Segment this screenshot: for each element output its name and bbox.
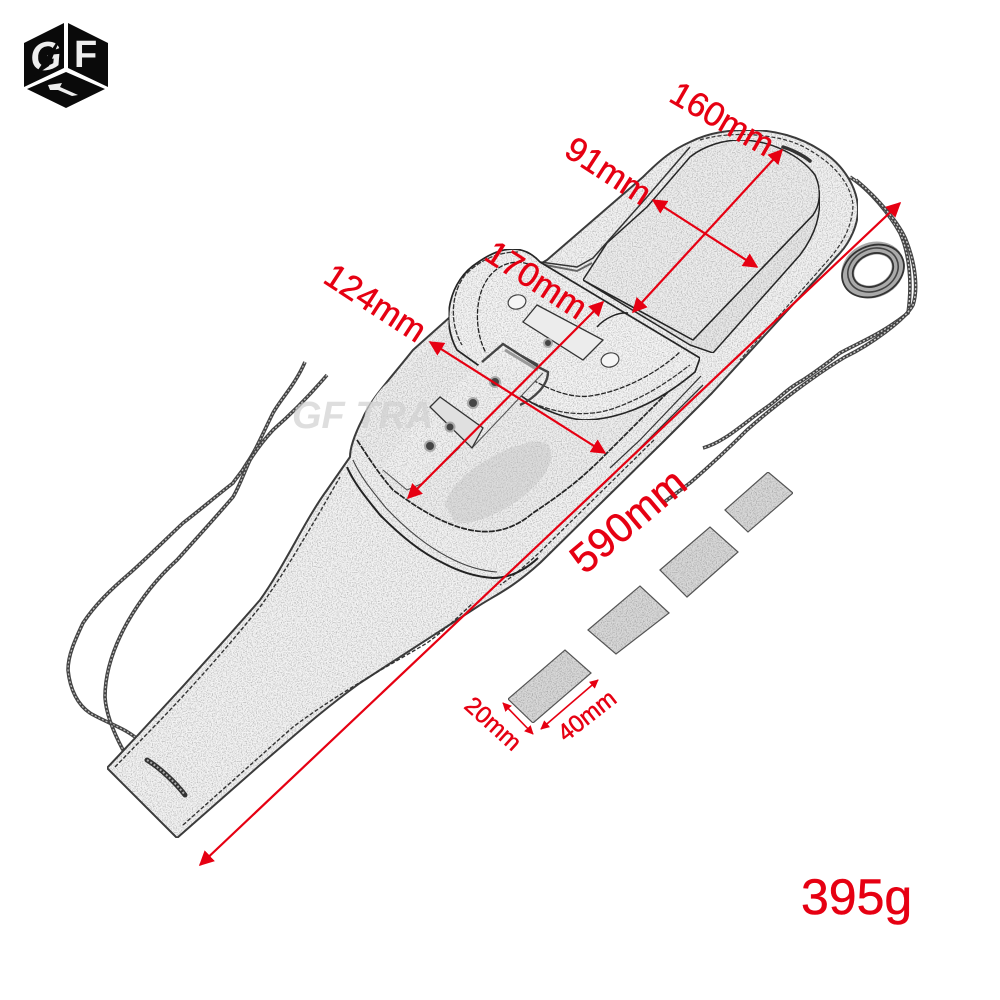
strap holes bbox=[425, 339, 552, 451]
lower pouch seam bbox=[347, 467, 538, 578]
back panel stitching bbox=[700, 135, 853, 360]
tail stitching bbox=[115, 477, 473, 825]
right edge double seam bbox=[500, 440, 654, 585]
watermark: GF TRA bbox=[292, 395, 433, 437]
label: 160mm: 160mm bbox=[663, 74, 781, 164]
upper pocket panel bbox=[583, 140, 819, 340]
label: 124mm: 124mm bbox=[317, 257, 433, 350]
pouch shading bbox=[445, 441, 551, 523]
strap keeper bbox=[430, 397, 483, 448]
label: 91mm: 91mm bbox=[558, 130, 658, 213]
dimension arrows bbox=[200, 150, 900, 865]
label: 20mm: 20mm bbox=[459, 692, 527, 756]
label: 40mm: 40mm bbox=[553, 685, 622, 747]
lower pouch seam line bbox=[357, 367, 693, 532]
flap rivets bbox=[506, 293, 621, 369]
buckle upper tab bbox=[523, 305, 603, 360]
label: 590mm: 590mm bbox=[561, 459, 695, 582]
left side cords bbox=[68, 362, 327, 750]
lower pouch panel bbox=[357, 330, 697, 532]
buckle frame bbox=[482, 344, 548, 405]
flap slit bbox=[597, 313, 628, 327]
top slot bbox=[783, 147, 810, 161]
leather tank bag body bbox=[107, 130, 858, 838]
right side cords with coil bbox=[663, 177, 916, 503]
body outline with grain bbox=[107, 130, 858, 838]
logo: GF cube: G bbox=[28, 33, 64, 80]
tail slot bbox=[147, 760, 185, 795]
label: 170mm: 170mm bbox=[478, 234, 594, 327]
logo: GF cube bbox=[24, 23, 108, 108]
logo: GF cube: F bbox=[74, 34, 97, 76]
strap bbox=[383, 362, 543, 490]
velcro strips bbox=[508, 472, 793, 723]
label: weight 395g: 395g bbox=[801, 869, 912, 925]
upper pocket band bbox=[583, 190, 820, 353]
main flap bbox=[449, 249, 700, 420]
flap stitching bbox=[453, 252, 690, 414]
side fold bbox=[540, 147, 690, 267]
